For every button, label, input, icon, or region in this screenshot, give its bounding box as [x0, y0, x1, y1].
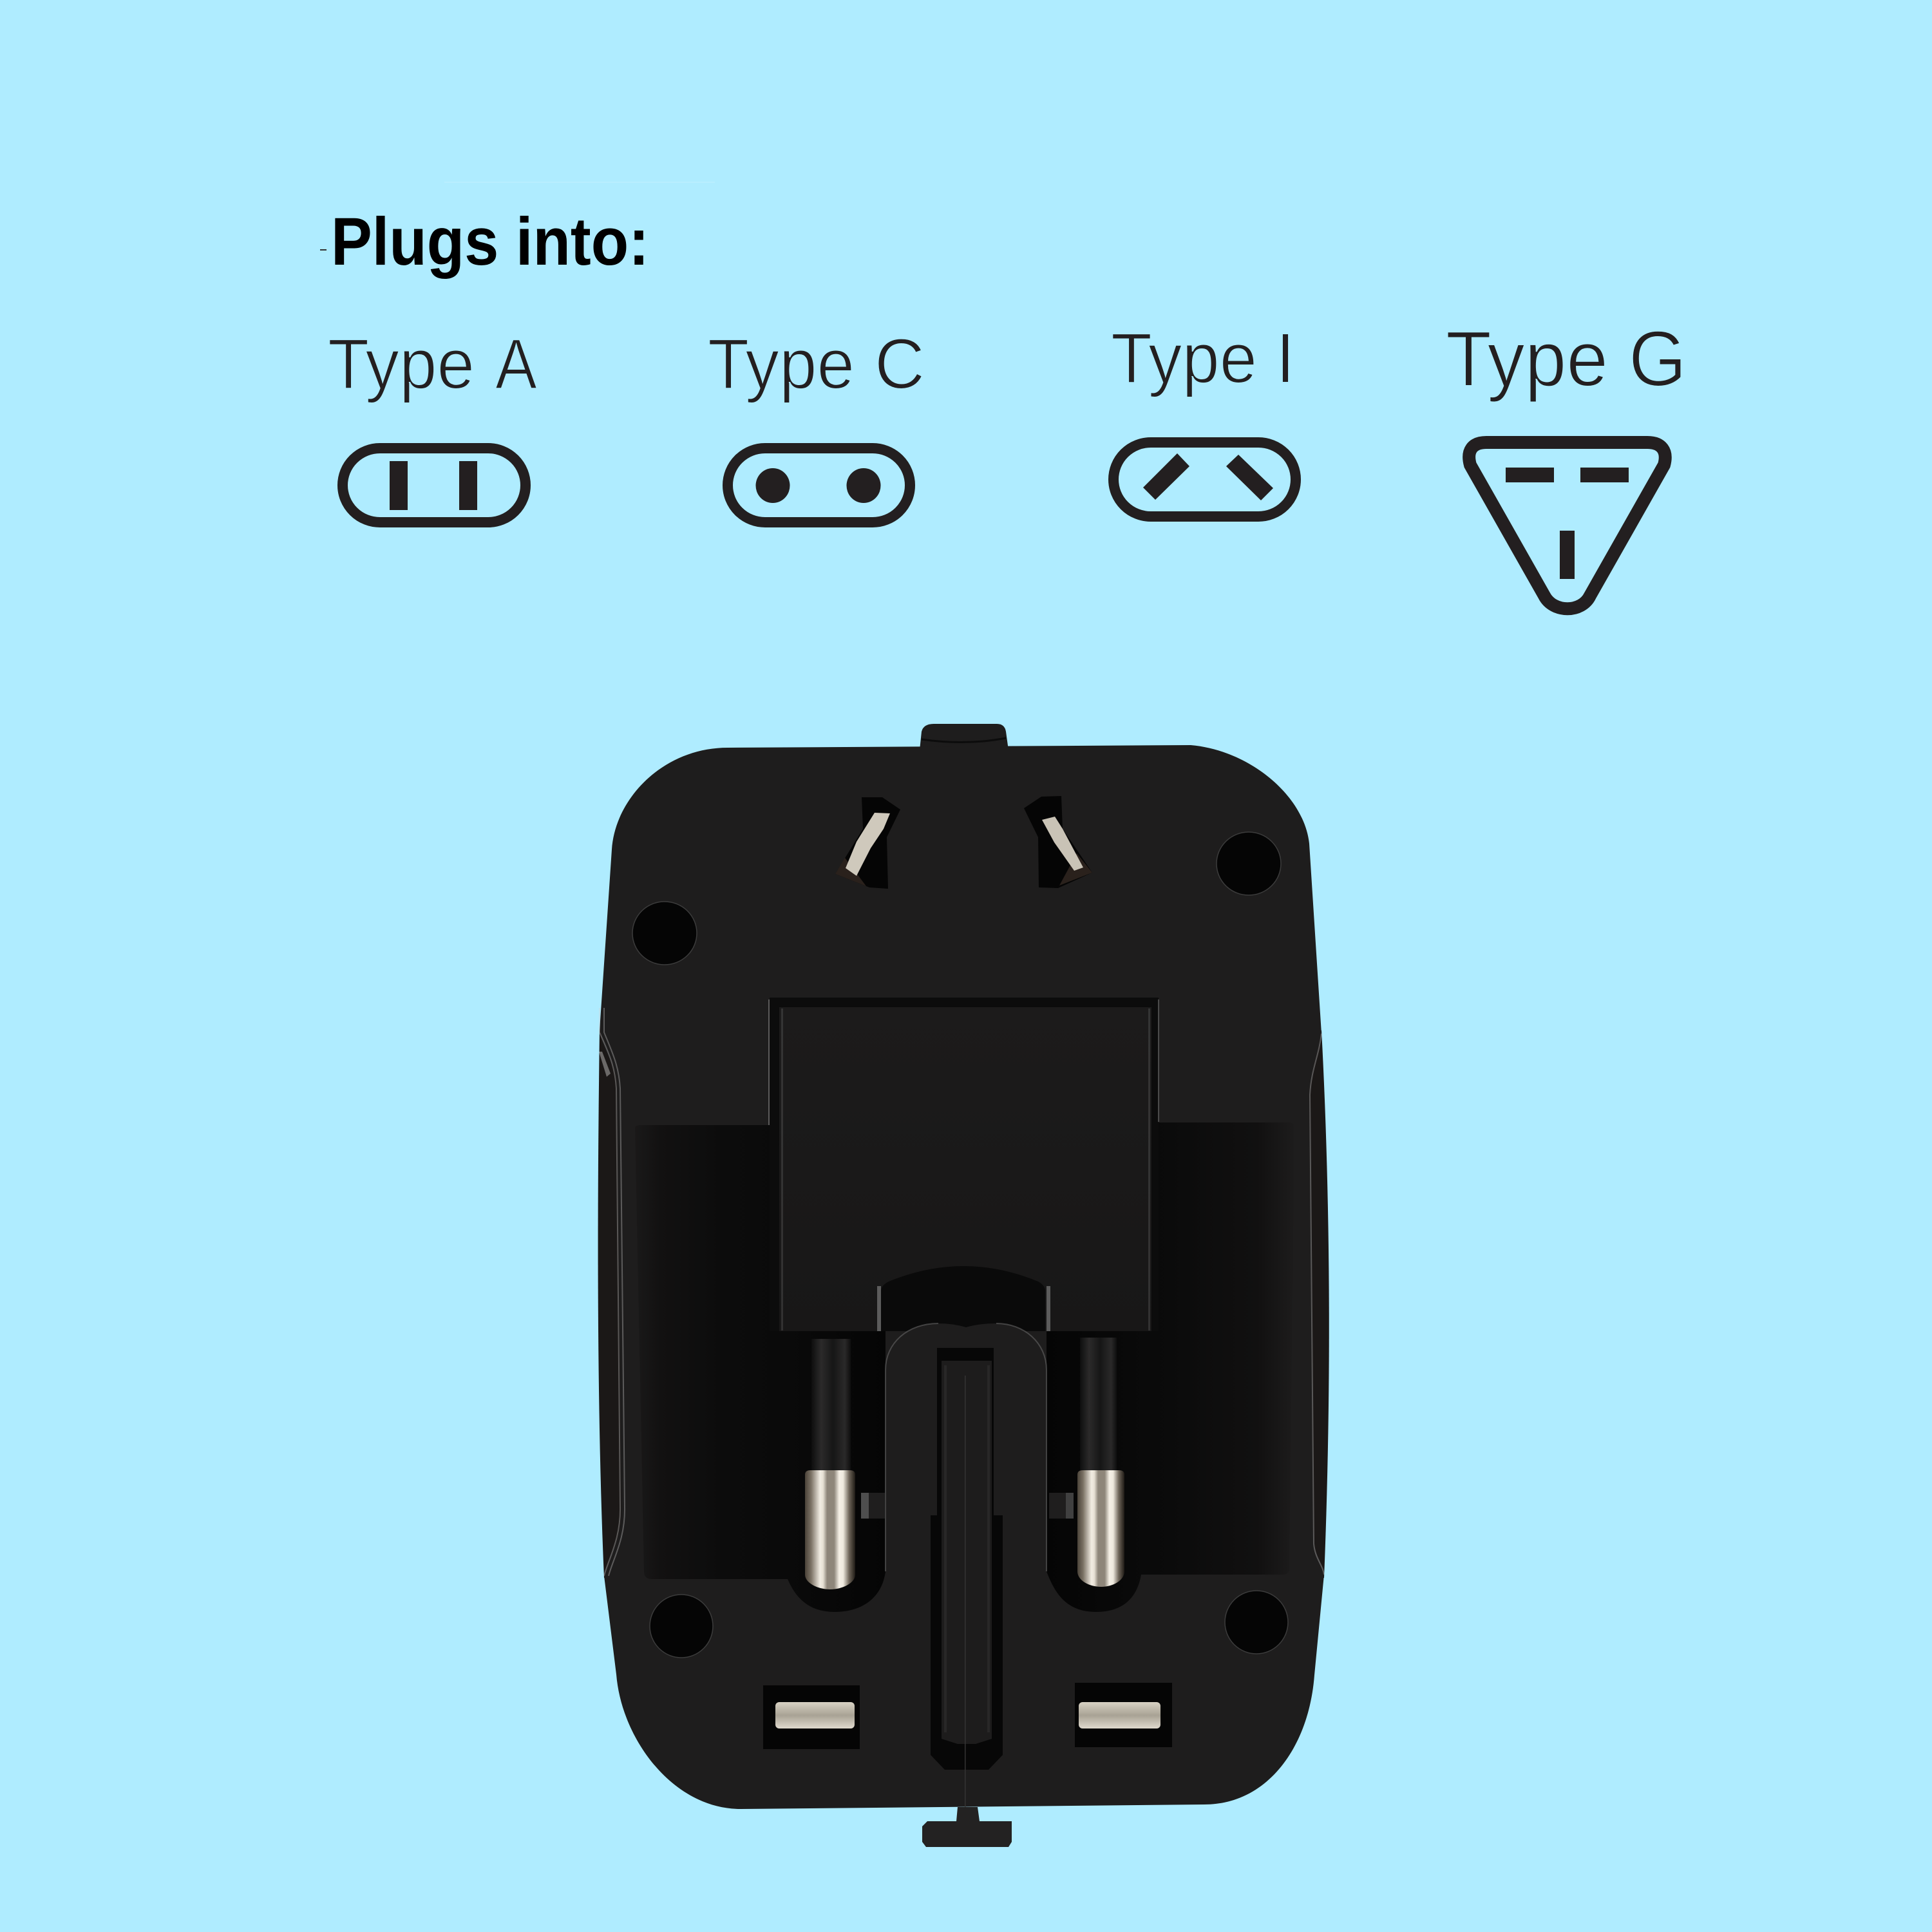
folding plate	[768, 998, 1159, 1331]
icon: Type I socket	[1113, 442, 1296, 516]
product: travel adapter	[598, 724, 1329, 1847]
left pin	[805, 1339, 855, 1589]
edge highlights	[599, 1008, 1324, 1576]
bottom-right contact	[1075, 1683, 1172, 1747]
top-right slot	[1024, 796, 1092, 888]
adapter body	[600, 745, 1324, 1809]
label: Type A: A	[495, 325, 538, 404]
left recess	[635, 1125, 886, 1612]
label: Type C: Type	[708, 325, 855, 404]
plug type I	[1111, 319, 1296, 516]
centre U tab	[886, 1323, 1046, 1616]
label: Type I: I	[1276, 319, 1295, 398]
centre slot	[931, 1348, 1003, 1807]
screw holes	[632, 832, 1288, 1658]
right recess	[1046, 1122, 1294, 1612]
plate notch	[881, 1266, 1045, 1331]
top-left slot	[835, 797, 900, 889]
icon: Type C socket	[728, 448, 910, 522]
bottom clip	[922, 1807, 1012, 1847]
top clip	[920, 724, 1009, 750]
heading: Plugs into: Plugs into:	[331, 204, 649, 279]
label: Type A: Type	[328, 325, 475, 404]
plug type A	[328, 325, 538, 522]
icon: Type A socket	[343, 448, 526, 522]
label: Type C: C	[875, 325, 925, 404]
label: Type I: Type	[1111, 319, 1257, 398]
label: Type G: G	[1629, 315, 1687, 402]
label: Type G: Type	[1446, 315, 1608, 402]
icon: Type G socket	[1469, 442, 1665, 609]
bottom-left contact	[763, 1685, 860, 1749]
small tabs	[861, 1493, 1074, 1519]
U tab edge highlights	[886, 1323, 1046, 1571]
plug type C	[708, 325, 925, 522]
right pin	[1077, 1338, 1124, 1587]
side band	[598, 1030, 1329, 1578]
plug type G	[1446, 315, 1687, 609]
